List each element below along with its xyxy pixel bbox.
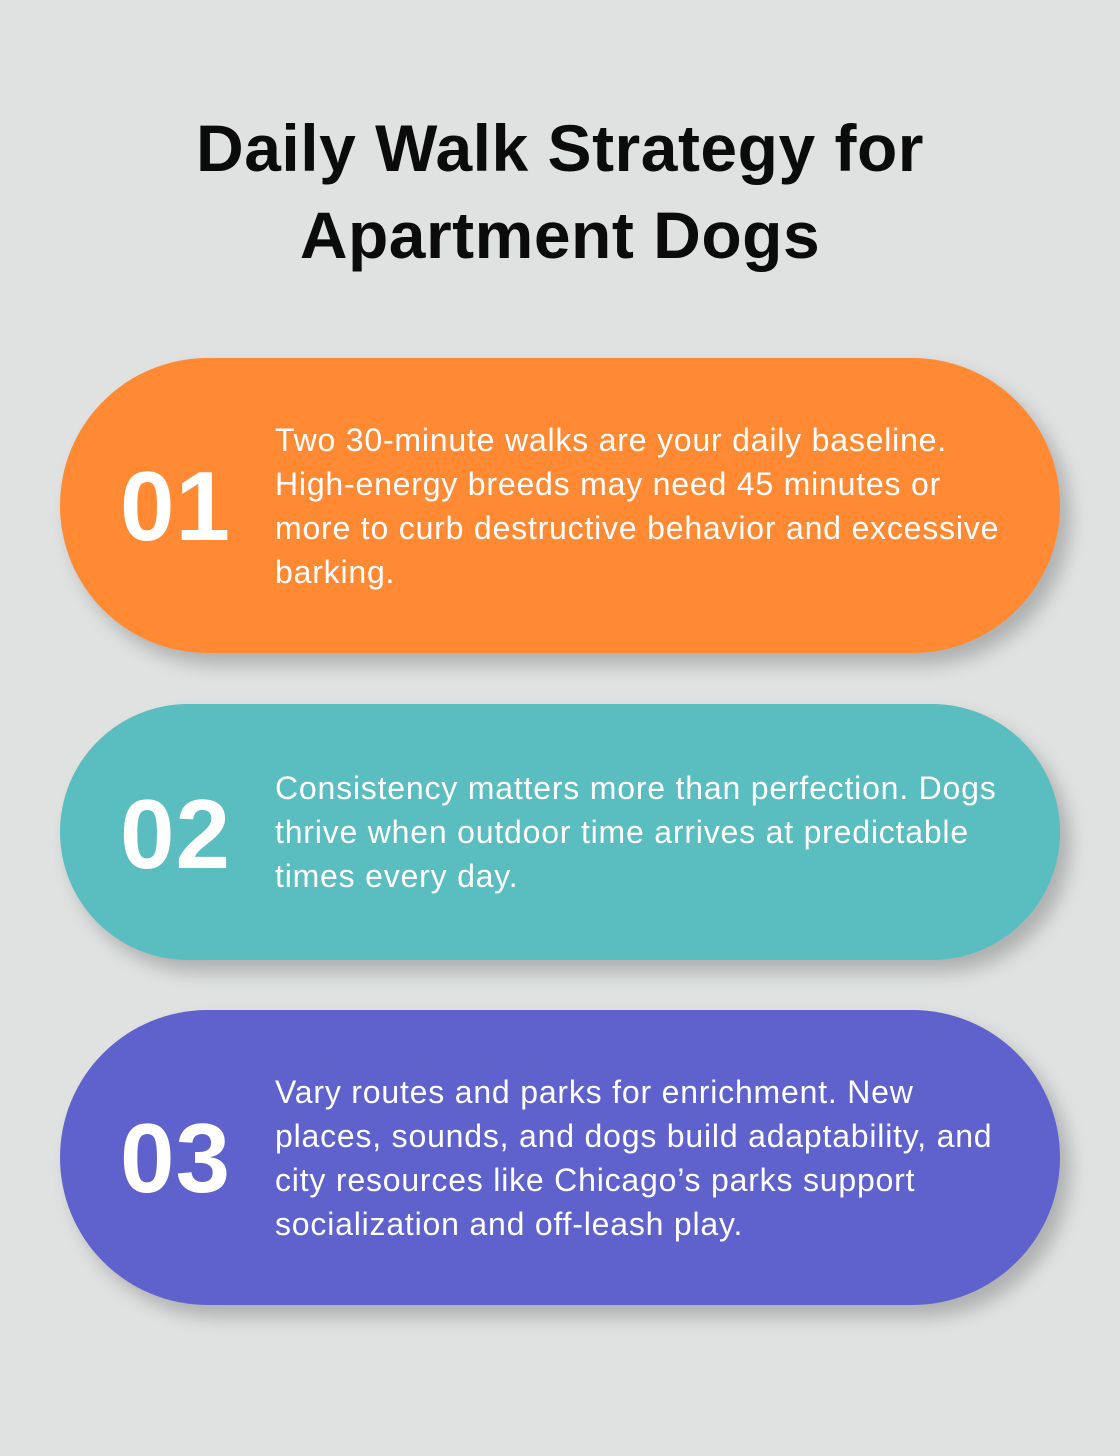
text 03: Vary routes and parks for enrichment. New (275, 1074, 914, 1110)
text 01: barking. (275, 554, 395, 590)
title: Daily Walk Strategy for (196, 111, 924, 185)
number 02: 02 (120, 779, 231, 889)
text 01: High-energy breeds may need 45 minutes or (275, 466, 941, 502)
text 02: Consistency matters more than perfection. Dogs (275, 770, 997, 806)
panel: step 02 (60, 704, 1060, 960)
panel: step 01 (60, 358, 1060, 653)
text 01: Two 30-minute walks are your daily baseline. (275, 422, 947, 458)
number 01: 01 (120, 451, 231, 561)
text 02 (275, 770, 997, 894)
text 01: more to curb destructive behavior and excessive (275, 510, 999, 546)
title (196, 111, 924, 272)
title: Apartment Dogs (300, 198, 820, 272)
text 03 (275, 1074, 992, 1242)
text 03: socialization and off-leash play. (275, 1206, 743, 1242)
text 01 (275, 422, 999, 590)
text 02: thrive when outdoor time arrives at predictable (275, 814, 969, 850)
text 03: places, sounds, and dogs build adaptability, and (275, 1118, 992, 1154)
text 03: city resources like Chicago’s parks support (275, 1162, 915, 1198)
panel: step 03 (60, 1010, 1060, 1305)
number 03: 03 (120, 1103, 231, 1213)
text 02: times every day. (275, 858, 518, 894)
